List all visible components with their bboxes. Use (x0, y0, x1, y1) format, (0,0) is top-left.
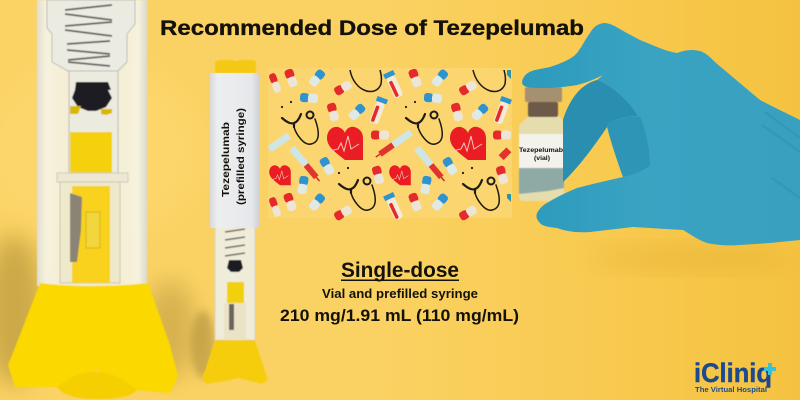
white syringe label (210, 73, 259, 228)
vial liquid (519, 168, 564, 194)
heading: Single-dose: Single-dose (341, 259, 459, 282)
yellow cap (215, 60, 256, 73)
icon: stethoscopes (281, 70, 505, 210)
logo: iCliniq (694, 358, 776, 394)
illustration: gloved hand (522, 23, 800, 245)
underline (341, 280, 459, 281)
spring (225, 229, 245, 256)
illustration: vial (519, 87, 564, 201)
clear outer tube (37, 0, 147, 286)
text: vial and syringe: Vial and prefilled syringe (322, 287, 478, 301)
text: prefilled syringe: (prefilled syringe) (235, 108, 247, 205)
black rubber stopper (72, 82, 112, 111)
illustration: medical pattern panel (267, 68, 512, 221)
text: Tezepelumab on vial: Tezepelumab (519, 147, 563, 154)
stopper (227, 260, 243, 272)
vial body (519, 115, 564, 201)
glove: middle finger (563, 80, 638, 182)
text: Tezepelumab: Tezepelumab (220, 122, 232, 197)
logo plus icon (764, 363, 776, 375)
needle guard (57, 173, 128, 283)
text: strength: 210 mg/1.91 mL (110 mg/mL) (280, 307, 519, 325)
logo wordmark: iCliniq (694, 358, 772, 388)
logo tagline: The Virtual Hospital (695, 387, 767, 394)
yellow base (8, 283, 178, 393)
text: vial: (vial) (534, 155, 550, 162)
vial neck (528, 102, 558, 117)
inner plunger housing (47, 0, 135, 71)
needle guard (224, 303, 246, 340)
text: vial label (519, 147, 563, 162)
vial cap (525, 87, 562, 102)
yellow drug liquid (70, 132, 112, 174)
illustration: small prefilled syringe (202, 60, 268, 384)
icon: syringes (267, 70, 511, 202)
icon: blood tubes (368, 70, 512, 221)
clear body (215, 226, 255, 340)
yellow drops (70, 106, 112, 115)
title: Recommended Dose of Tezepelumab (160, 17, 584, 40)
yellow base (202, 340, 268, 384)
glove: ring finger (607, 117, 650, 177)
illustration: large autoinjector (8, 0, 178, 399)
vial label (519, 134, 564, 168)
inner barrel (69, 71, 118, 175)
text: single-dose details (280, 259, 519, 325)
icon: hearts (269, 127, 486, 185)
icon: capsules (268, 68, 511, 221)
yellow liquid (227, 282, 244, 303)
